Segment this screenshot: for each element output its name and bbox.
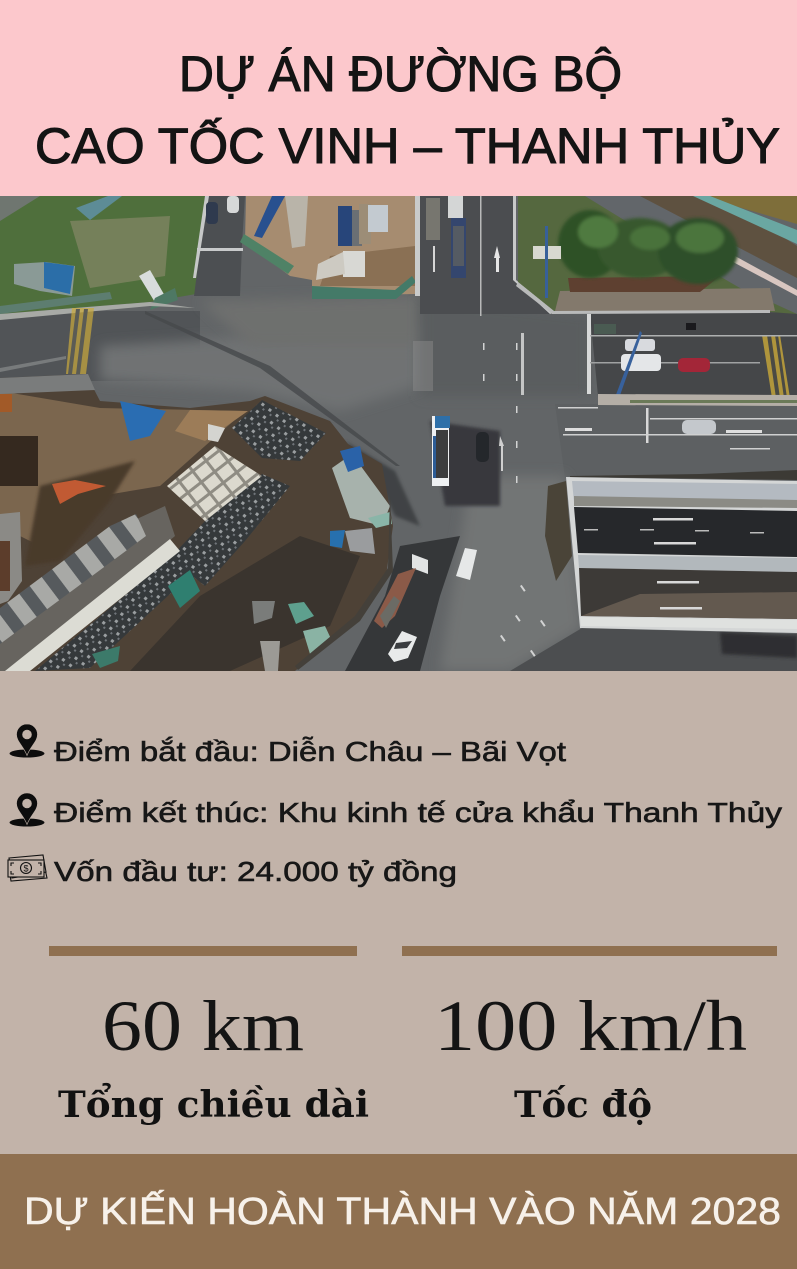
road: north arm with trucks bbox=[420, 196, 555, 316]
text: start point: Điểm bắt đầu: Diễn Châu – Bãi Vọt bbox=[54, 736, 566, 767]
title line 1: DỰ ÁN ĐƯỜNG BỘ bbox=[179, 46, 622, 102]
panel: title header bbox=[0, 0, 797, 196]
panel: completion banner bbox=[0, 1154, 797, 1269]
road markings: west and east stop lines bbox=[0, 308, 797, 466]
icon: banknotes bbox=[8, 855, 47, 881]
underpass tunnel entrance bbox=[545, 470, 797, 633]
stat: speed: 100 km/h bbox=[434, 986, 747, 1066]
vehicles: east approach bbox=[565, 323, 762, 443]
vehicle: white car bottom bbox=[388, 631, 417, 662]
panel: project information bbox=[0, 671, 797, 1154]
stat: speed bbox=[402, 946, 777, 1126]
panel: completion banner: DỰ KIẾN HOÀN THÀNH VÀO NĂM 2028 bbox=[24, 1189, 781, 1233]
text: end point: Điểm kết thúc: Khu kinh tế cửa khẩu Thanh Thủy bbox=[54, 797, 782, 828]
lane dashes: intersection bbox=[483, 343, 546, 657]
road surface tones bbox=[0, 296, 797, 671]
icon: start location pin bbox=[10, 724, 44, 758]
ramp road bbox=[0, 506, 175, 671]
ground: top-left grass bbox=[0, 196, 205, 320]
stat: total length: 60 km bbox=[102, 986, 304, 1066]
stat: total length bbox=[49, 946, 369, 1126]
site shed and materials bbox=[332, 454, 390, 526]
stat: speed: Tốc độ bbox=[514, 1084, 652, 1126]
ground: top-right island with trees bbox=[516, 196, 797, 314]
photo: aerial view of intersection construction site bbox=[0, 196, 797, 671]
ground: bottom-left construction site bbox=[0, 374, 393, 671]
stat: total length: Tổng chiều dài bbox=[58, 1084, 369, 1126]
title line 2: CAO TỐC VINH – THANH THỦY bbox=[35, 117, 780, 174]
icon: end location pin bbox=[10, 793, 44, 826]
icon: banknotes: $ bbox=[23, 864, 29, 874]
median strip bbox=[598, 394, 797, 406]
road: east lower lanes dashes bbox=[558, 407, 797, 450]
text: investment: Vốn đầu tư: 24.000 tỷ đồng bbox=[54, 856, 457, 887]
precast block stack and scaffolds bbox=[232, 400, 326, 461]
ground: top-centre construction yard bbox=[240, 196, 420, 299]
road: north-west carriageway with cars bbox=[193, 196, 245, 296]
vehicles: central intersection trucks and cars bbox=[374, 416, 504, 628]
